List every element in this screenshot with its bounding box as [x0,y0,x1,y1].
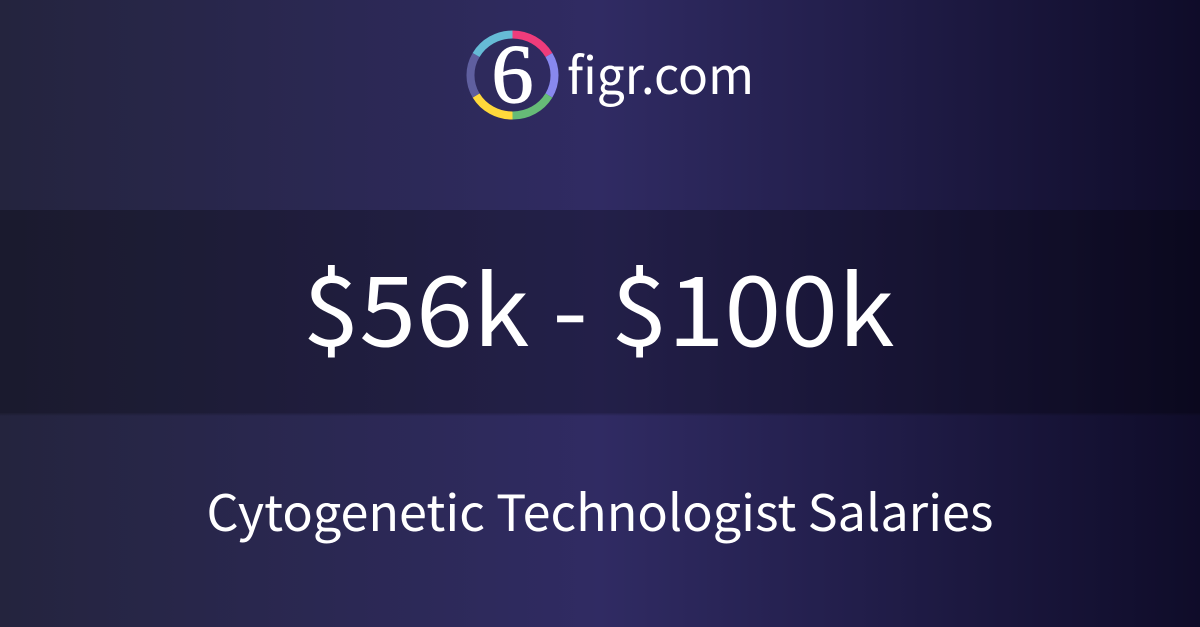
salary range: $56k - $100k [302,233,895,374]
icon: ring [470,34,555,116]
panel: salary band [0,210,1200,416]
subtitle: Cytogenetic Technologist Salaries [206,474,994,546]
logo [470,28,754,121]
logo wordmark: figr.com [567,35,754,109]
icon: six: 6 [492,28,534,121]
